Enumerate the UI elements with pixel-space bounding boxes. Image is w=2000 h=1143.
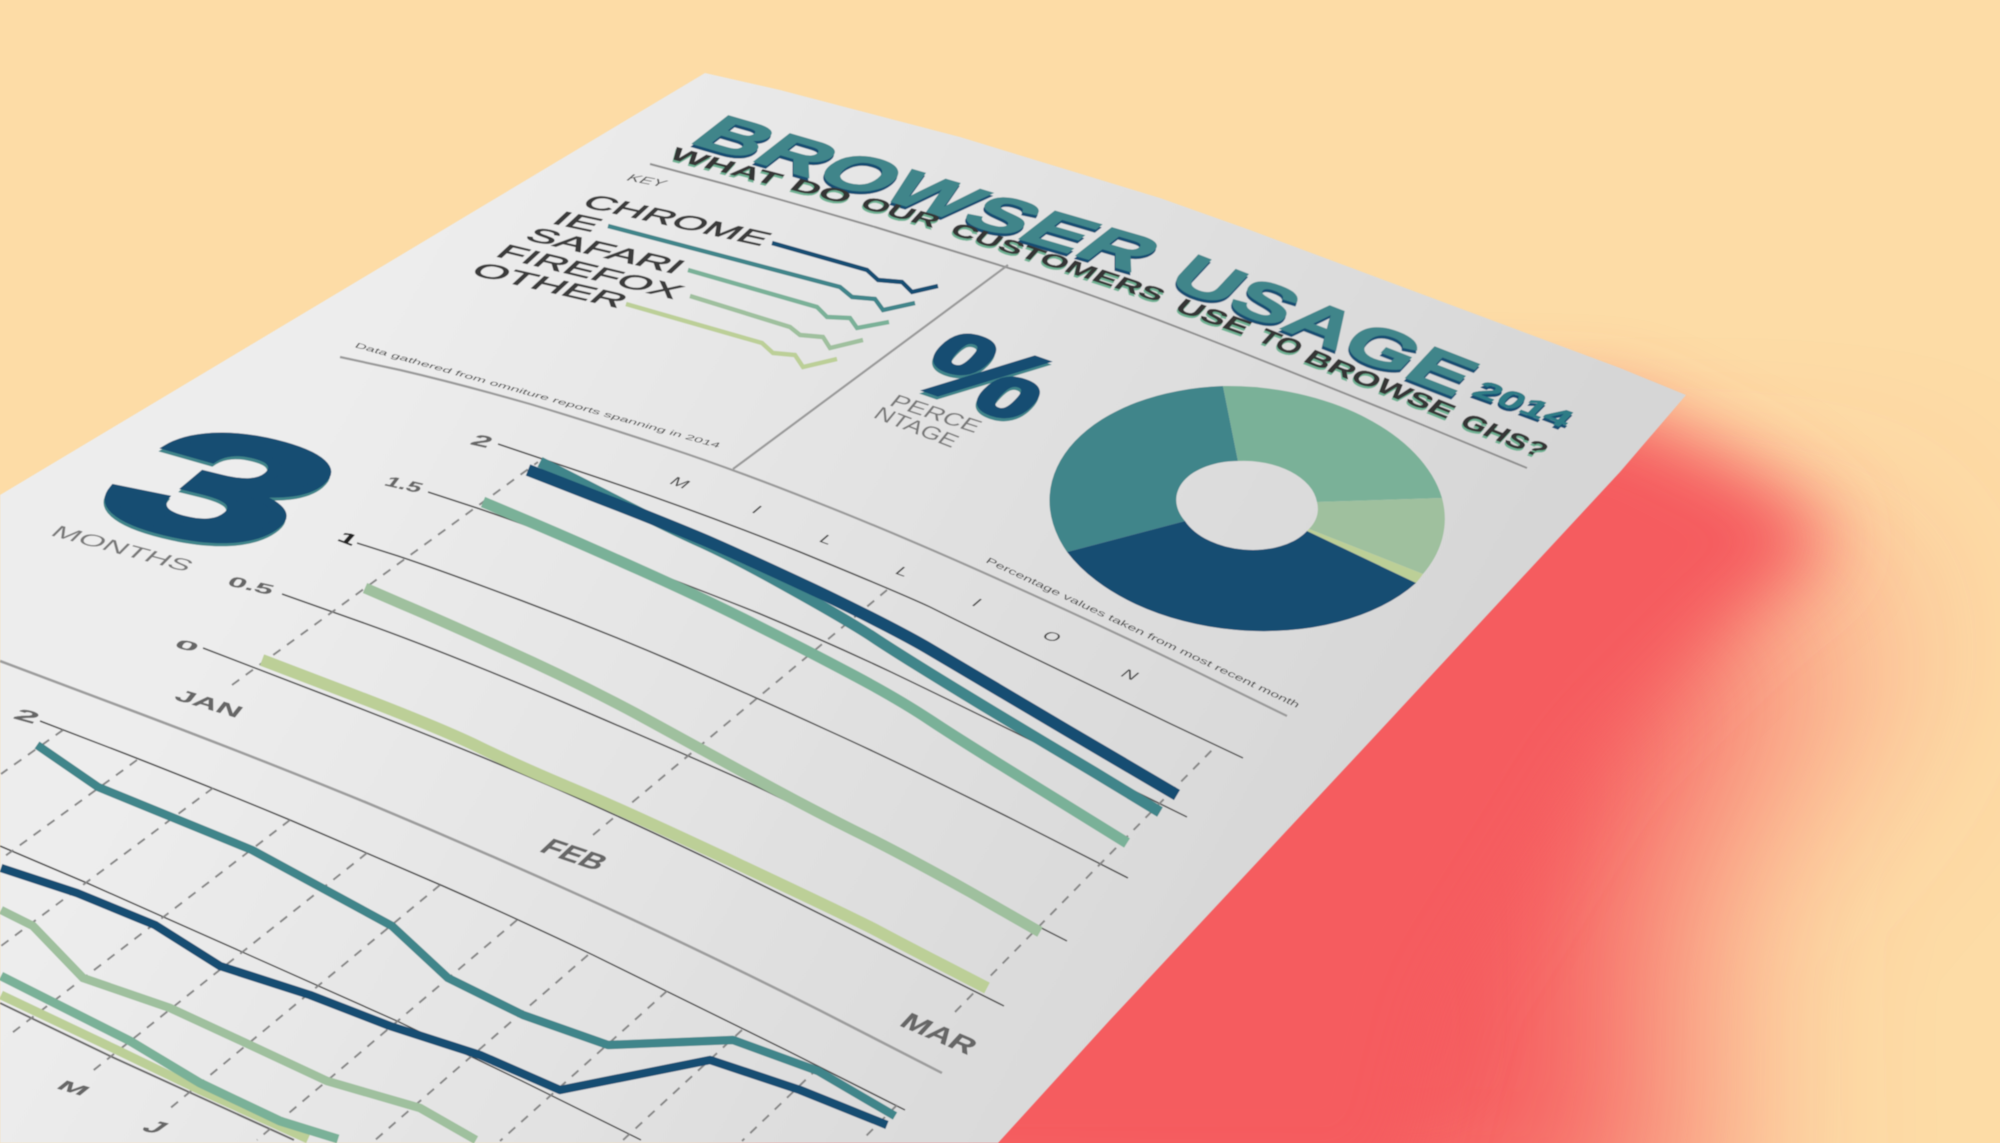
subtitle: USE [1169, 294, 1258, 339]
y axis labels: 1.5 [380, 473, 428, 496]
subtitle: TO [1251, 325, 1309, 360]
y axis label: 2 [9, 705, 45, 727]
percentage label [869, 392, 986, 452]
slice: IE [1049, 386, 1238, 552]
heading: browser usage [675, 106, 1492, 407]
panel: key [353, 173, 938, 449]
vertical axis caption: million: I [748, 503, 766, 516]
subtitle: BROWSE [1298, 346, 1461, 423]
vertical axis caption: million [666, 474, 1143, 683]
percentage label: NTAGE [869, 404, 963, 452]
heading: year: 2014 [1465, 376, 1581, 433]
month labels: JAN [171, 685, 248, 721]
key labels: SAFARI [519, 224, 691, 278]
key labels: CHROME [576, 190, 778, 250]
slice: Other [1307, 529, 1423, 583]
y axis labels: 1 [333, 528, 363, 549]
key legend lines [608, 226, 938, 367]
donut chart [1049, 386, 1445, 631]
paper sheet: Data gathered from omniture reports spanning in 2014 [353, 341, 723, 449]
month labels: FEB [533, 835, 614, 876]
background: blurred red glow [700, 300, 1900, 1143]
months label: MONTHS [46, 522, 199, 575]
month labels: J [135, 1117, 175, 1137]
series: ie [37, 745, 895, 1116]
heading: browser usage: USAGE [1156, 244, 1492, 407]
month labels: MAR [893, 1009, 983, 1060]
vertical axis caption: million: N [1117, 667, 1143, 683]
subtitle [664, 143, 1554, 462]
paper sheet: Percentage values taken from most recent month [984, 556, 1302, 710]
vertical axis caption: million: L [891, 564, 915, 579]
line chart: yearly [0, 705, 905, 1141]
icon: percent sign: % [886, 313, 1085, 440]
vertical axis caption: million: O [1038, 628, 1066, 645]
subtitle: CUSTOMERS [945, 218, 1171, 306]
subtitle: OUR [854, 193, 946, 232]
key labels [465, 190, 778, 312]
slice: Safari [1223, 386, 1442, 502]
heading: browser usage: BROWSER [675, 106, 1179, 281]
subtitle: GHS? [1454, 409, 1554, 462]
subtitle: DO [784, 176, 857, 208]
slice: Firefox [1309, 498, 1445, 574]
series: firefox [1, 910, 476, 1140]
series: safari [483, 502, 1127, 843]
title [664, 106, 1581, 462]
vertical axis caption: million: I [968, 596, 986, 609]
paper sheet [0, 73, 1686, 1143]
line chart: three months [170, 431, 1243, 1060]
series: chrome [528, 470, 1177, 795]
percentage label: PERCE [885, 392, 986, 437]
month labels [171, 685, 983, 1060]
panel: percentage [869, 313, 1445, 710]
series: firefox [365, 588, 1040, 932]
series: ie [540, 462, 1160, 812]
panel: three months [46, 394, 394, 580]
vertical axis caption: million: L [815, 532, 839, 547]
series: chrome [1, 868, 887, 1125]
series: safari [1, 976, 338, 1139]
key labels: IE [546, 207, 609, 236]
key labels: FIREFOX [490, 240, 690, 303]
y axis labels: 0.5 [224, 575, 278, 599]
slice: Chrome [1067, 521, 1416, 631]
big number 3: 3 [49, 394, 394, 580]
key labels: OTHER [465, 259, 634, 312]
y axis labels: 0 [170, 638, 203, 656]
vertical axis caption: million: M [666, 474, 694, 491]
y axis labels [170, 431, 498, 656]
y axis labels: 2 [466, 431, 498, 451]
subtitle: WHAT [664, 143, 790, 190]
month labels: M [52, 1078, 95, 1099]
key heading: KEY [622, 173, 671, 190]
series: other [1, 995, 308, 1139]
month labels [52, 1078, 175, 1137]
series: other [262, 660, 987, 988]
